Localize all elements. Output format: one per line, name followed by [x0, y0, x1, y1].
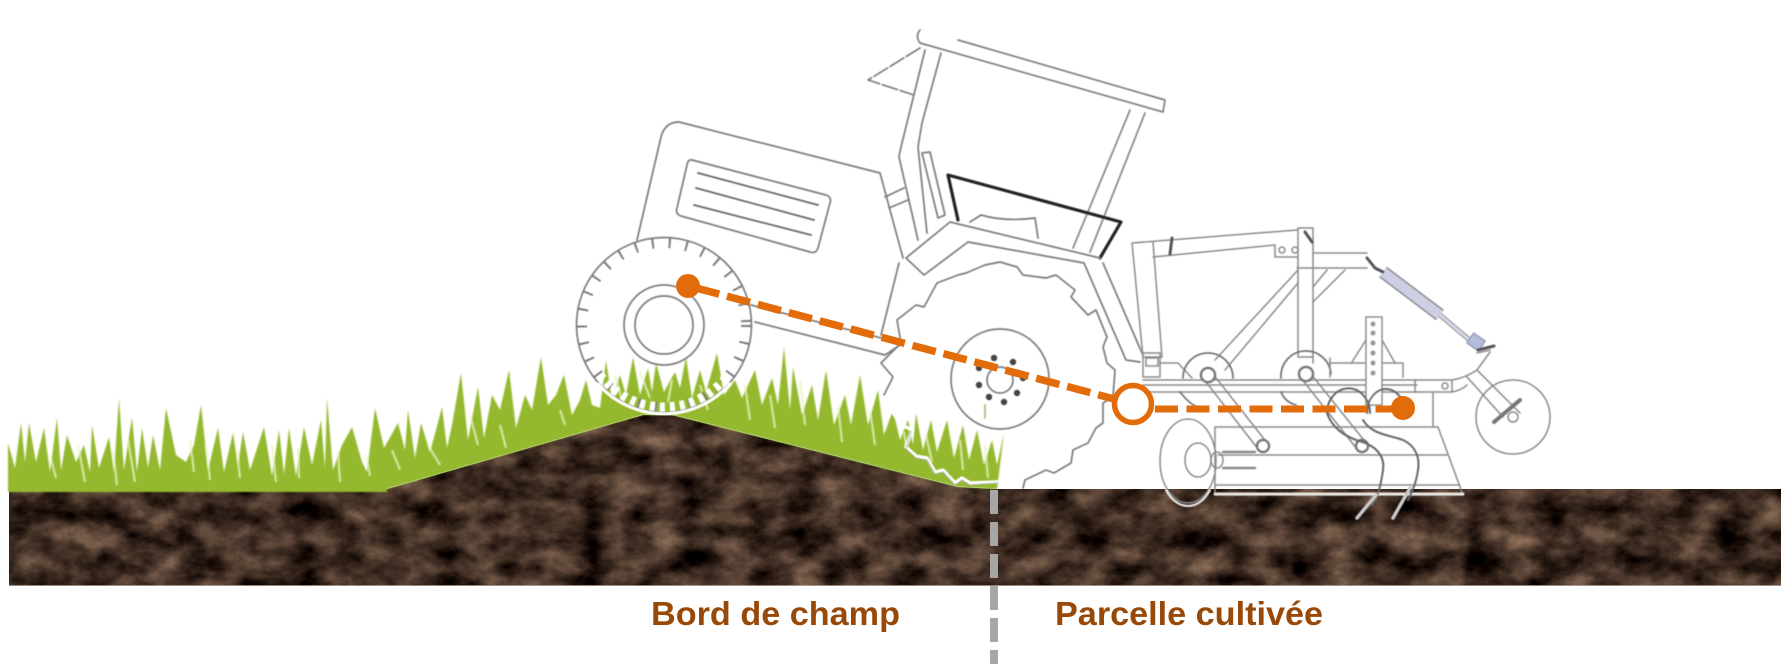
hood vent grille: [676, 160, 830, 252]
cultivator tines: [1327, 388, 1418, 518]
cab posts: [885, 50, 1145, 252]
tractor line drawing: [576, 30, 1165, 488]
perforated vertical plate: [1330, 317, 1403, 405]
big tractor wheel with lugs: [881, 262, 1115, 488]
label: cultivated plot: Parcelle cultivée: [1055, 595, 1323, 632]
rear small wheel: [576, 238, 752, 414]
tractor hood: [637, 122, 903, 258]
cab seat frame: [948, 175, 1121, 258]
grass on the field edge: [8, 347, 1004, 492]
cultivator implement: [1132, 228, 1550, 518]
cab roof and visor: [868, 30, 1165, 112]
grey dashed boundary line: [990, 490, 998, 664]
label: field edge: Bord de champ: [651, 595, 900, 632]
orange dot on rear wheel axle: [676, 274, 700, 298]
fender: [906, 222, 1142, 362]
orange dashed line: hitch point to implement: [1155, 406, 1395, 412]
right gauge disc and arm: [1415, 350, 1550, 454]
seat: [970, 215, 1038, 238]
orange dashed line: rear wheel axle to hitch point: [696, 288, 1118, 400]
left coulter disc: [1160, 419, 1255, 506]
implement upper frame: [1132, 228, 1367, 370]
soil layer with hump: [9, 415, 1781, 586]
hydraulic cylinder: [1367, 258, 1494, 351]
lower frame: [1215, 393, 1463, 495]
main beam and pivots: [1143, 351, 1417, 452]
orange hitch ring: [1114, 386, 1152, 422]
chassis: [751, 263, 901, 355]
orange dot on implement: [1391, 396, 1415, 420]
